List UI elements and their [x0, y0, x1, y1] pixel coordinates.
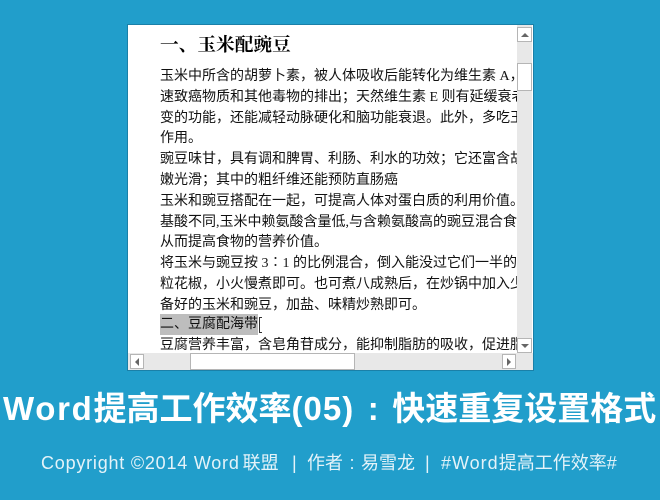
scroll up button: [517, 27, 532, 42]
heading: section two text: 二、豆腐配海带: [160, 317, 258, 332]
paragraph line 7: 玉米和豌豆搭配在一起，可提高人体对蛋白质的利用价值。: [160, 194, 517, 209]
paragraph line 9: 从而提高食物的营养价值。: [160, 235, 328, 250]
scroll left button: [130, 354, 144, 369]
footer credit line: 作者 易雪龙: [307, 453, 415, 473]
footer credit line: |: [292, 453, 297, 473]
footer credit line: [41, 453, 617, 473]
title: Word提高工作效率(05) 快速重复设置格式: [3, 390, 656, 427]
panel: Word document window: [128, 25, 533, 370]
document text area: [160, 34, 517, 353]
text cursor: [259, 317, 262, 333]
scroll down button: [517, 338, 532, 353]
paragraph line 4: 作用。: [160, 131, 202, 146]
vertical scrollbar: [517, 25, 532, 353]
selected heading: section two: [160, 314, 258, 335]
footer credit line: #Word提高工作效率#: [441, 453, 617, 473]
heading: section one: 一、玉米配豌豆: [160, 35, 291, 56]
horizontal scroll thumb: [190, 353, 355, 370]
title: :: [368, 390, 379, 427]
paragraph line 6: 嫩光滑；其中的粗纤维还能预防直肠癌: [160, 173, 398, 188]
horizontal scrollbar: [128, 353, 533, 370]
footer credit line: :: [349, 453, 354, 473]
footer credit line: Copyright ©2014 Word联盟: [41, 453, 279, 473]
vertical scroll thumb: [517, 63, 532, 91]
scroll right button: [502, 354, 516, 369]
paragraph line 12: 备好的玉米和豌豆，加盐、味精炒熟即可。: [160, 298, 426, 313]
footer credit line: |: [425, 453, 430, 473]
